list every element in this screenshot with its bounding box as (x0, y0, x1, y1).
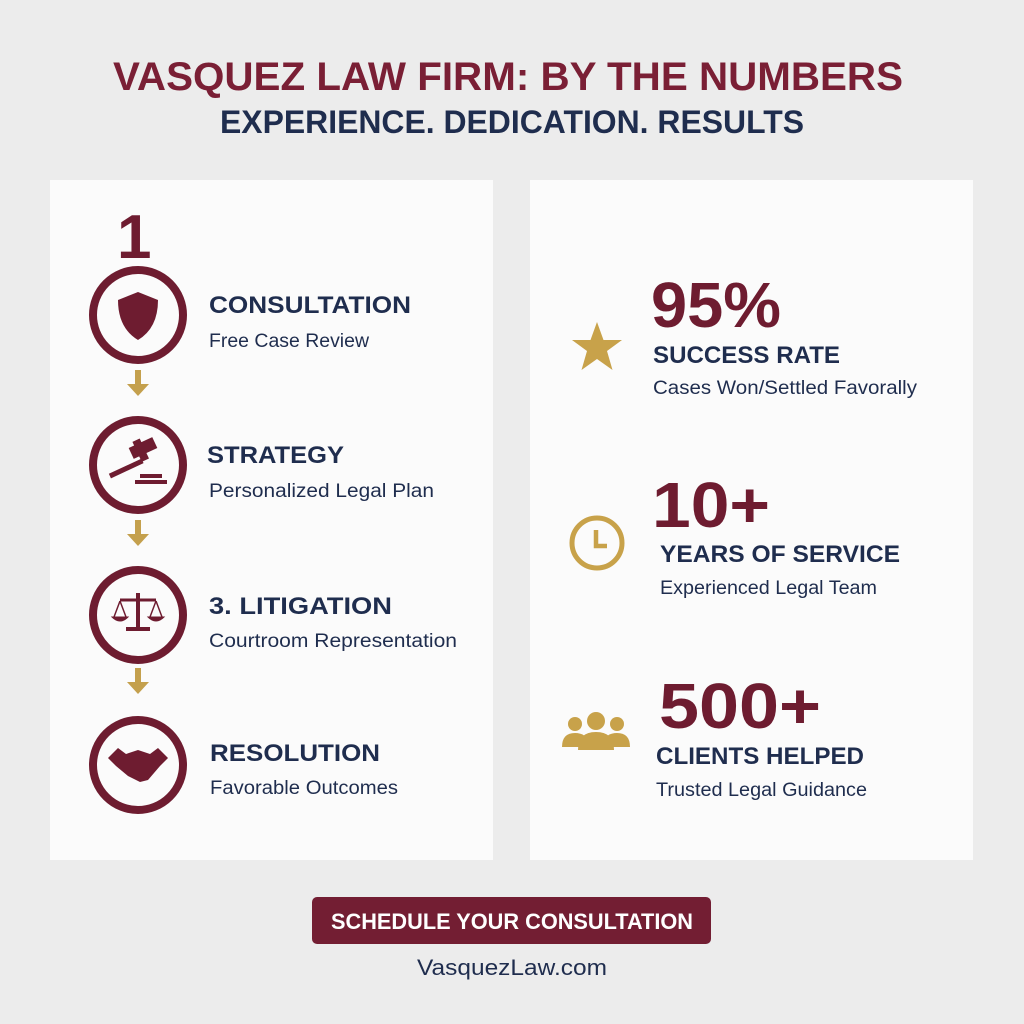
stat: years: Experienced Legal Team (660, 578, 877, 599)
stat: success rate: Cases Won/Settled Favorally (653, 378, 918, 399)
step: resolution (93, 720, 398, 810)
step: consultation: CONSULTATION (209, 292, 411, 319)
stat: clients: CLIENTS HELPED (656, 743, 864, 770)
step: consultation: Free Case Review (209, 331, 369, 352)
step number: 1 (117, 203, 151, 272)
arrow (127, 520, 149, 546)
website url: VasquezLaw.com (417, 955, 607, 980)
subtitle: EXPERIENCE. DEDICATION. RESULTS (220, 104, 804, 140)
stat: success rate: SUCCESS RATE (653, 342, 840, 369)
step: strategy (93, 420, 434, 510)
stat: years: YEARS OF SERVICE (660, 541, 900, 568)
step: litigation: 3. LITIGATION (209, 593, 392, 620)
step: consultation (93, 270, 411, 360)
stat: clients: 500+ (659, 670, 821, 742)
stat: years: 10+ (652, 469, 770, 541)
stat: success rate: 95% (651, 269, 781, 341)
stat: success rate (572, 269, 918, 399)
step: strategy: Personalized Legal Plan (209, 481, 434, 502)
panel: stats (530, 180, 973, 860)
step: litigation: Courtroom Representation (209, 631, 457, 652)
title: VASQUEZ LAW FIRM: BY THE NUMBERS (113, 55, 903, 99)
step: resolution: Favorable Outcomes (210, 778, 398, 799)
stat: years (572, 469, 900, 599)
step: litigation (93, 570, 457, 660)
button: schedule (312, 897, 711, 944)
stat: clients: Trusted Legal Guidance (656, 780, 867, 801)
button: schedule: SCHEDULE YOUR CONSULTATION (331, 909, 693, 934)
stat: clients (562, 670, 867, 801)
step: strategy: STRATEGY (207, 442, 344, 469)
arrow (127, 370, 149, 396)
step: resolution: RESOLUTION (210, 740, 380, 767)
panel: process steps (50, 180, 493, 860)
arrow (127, 668, 149, 694)
